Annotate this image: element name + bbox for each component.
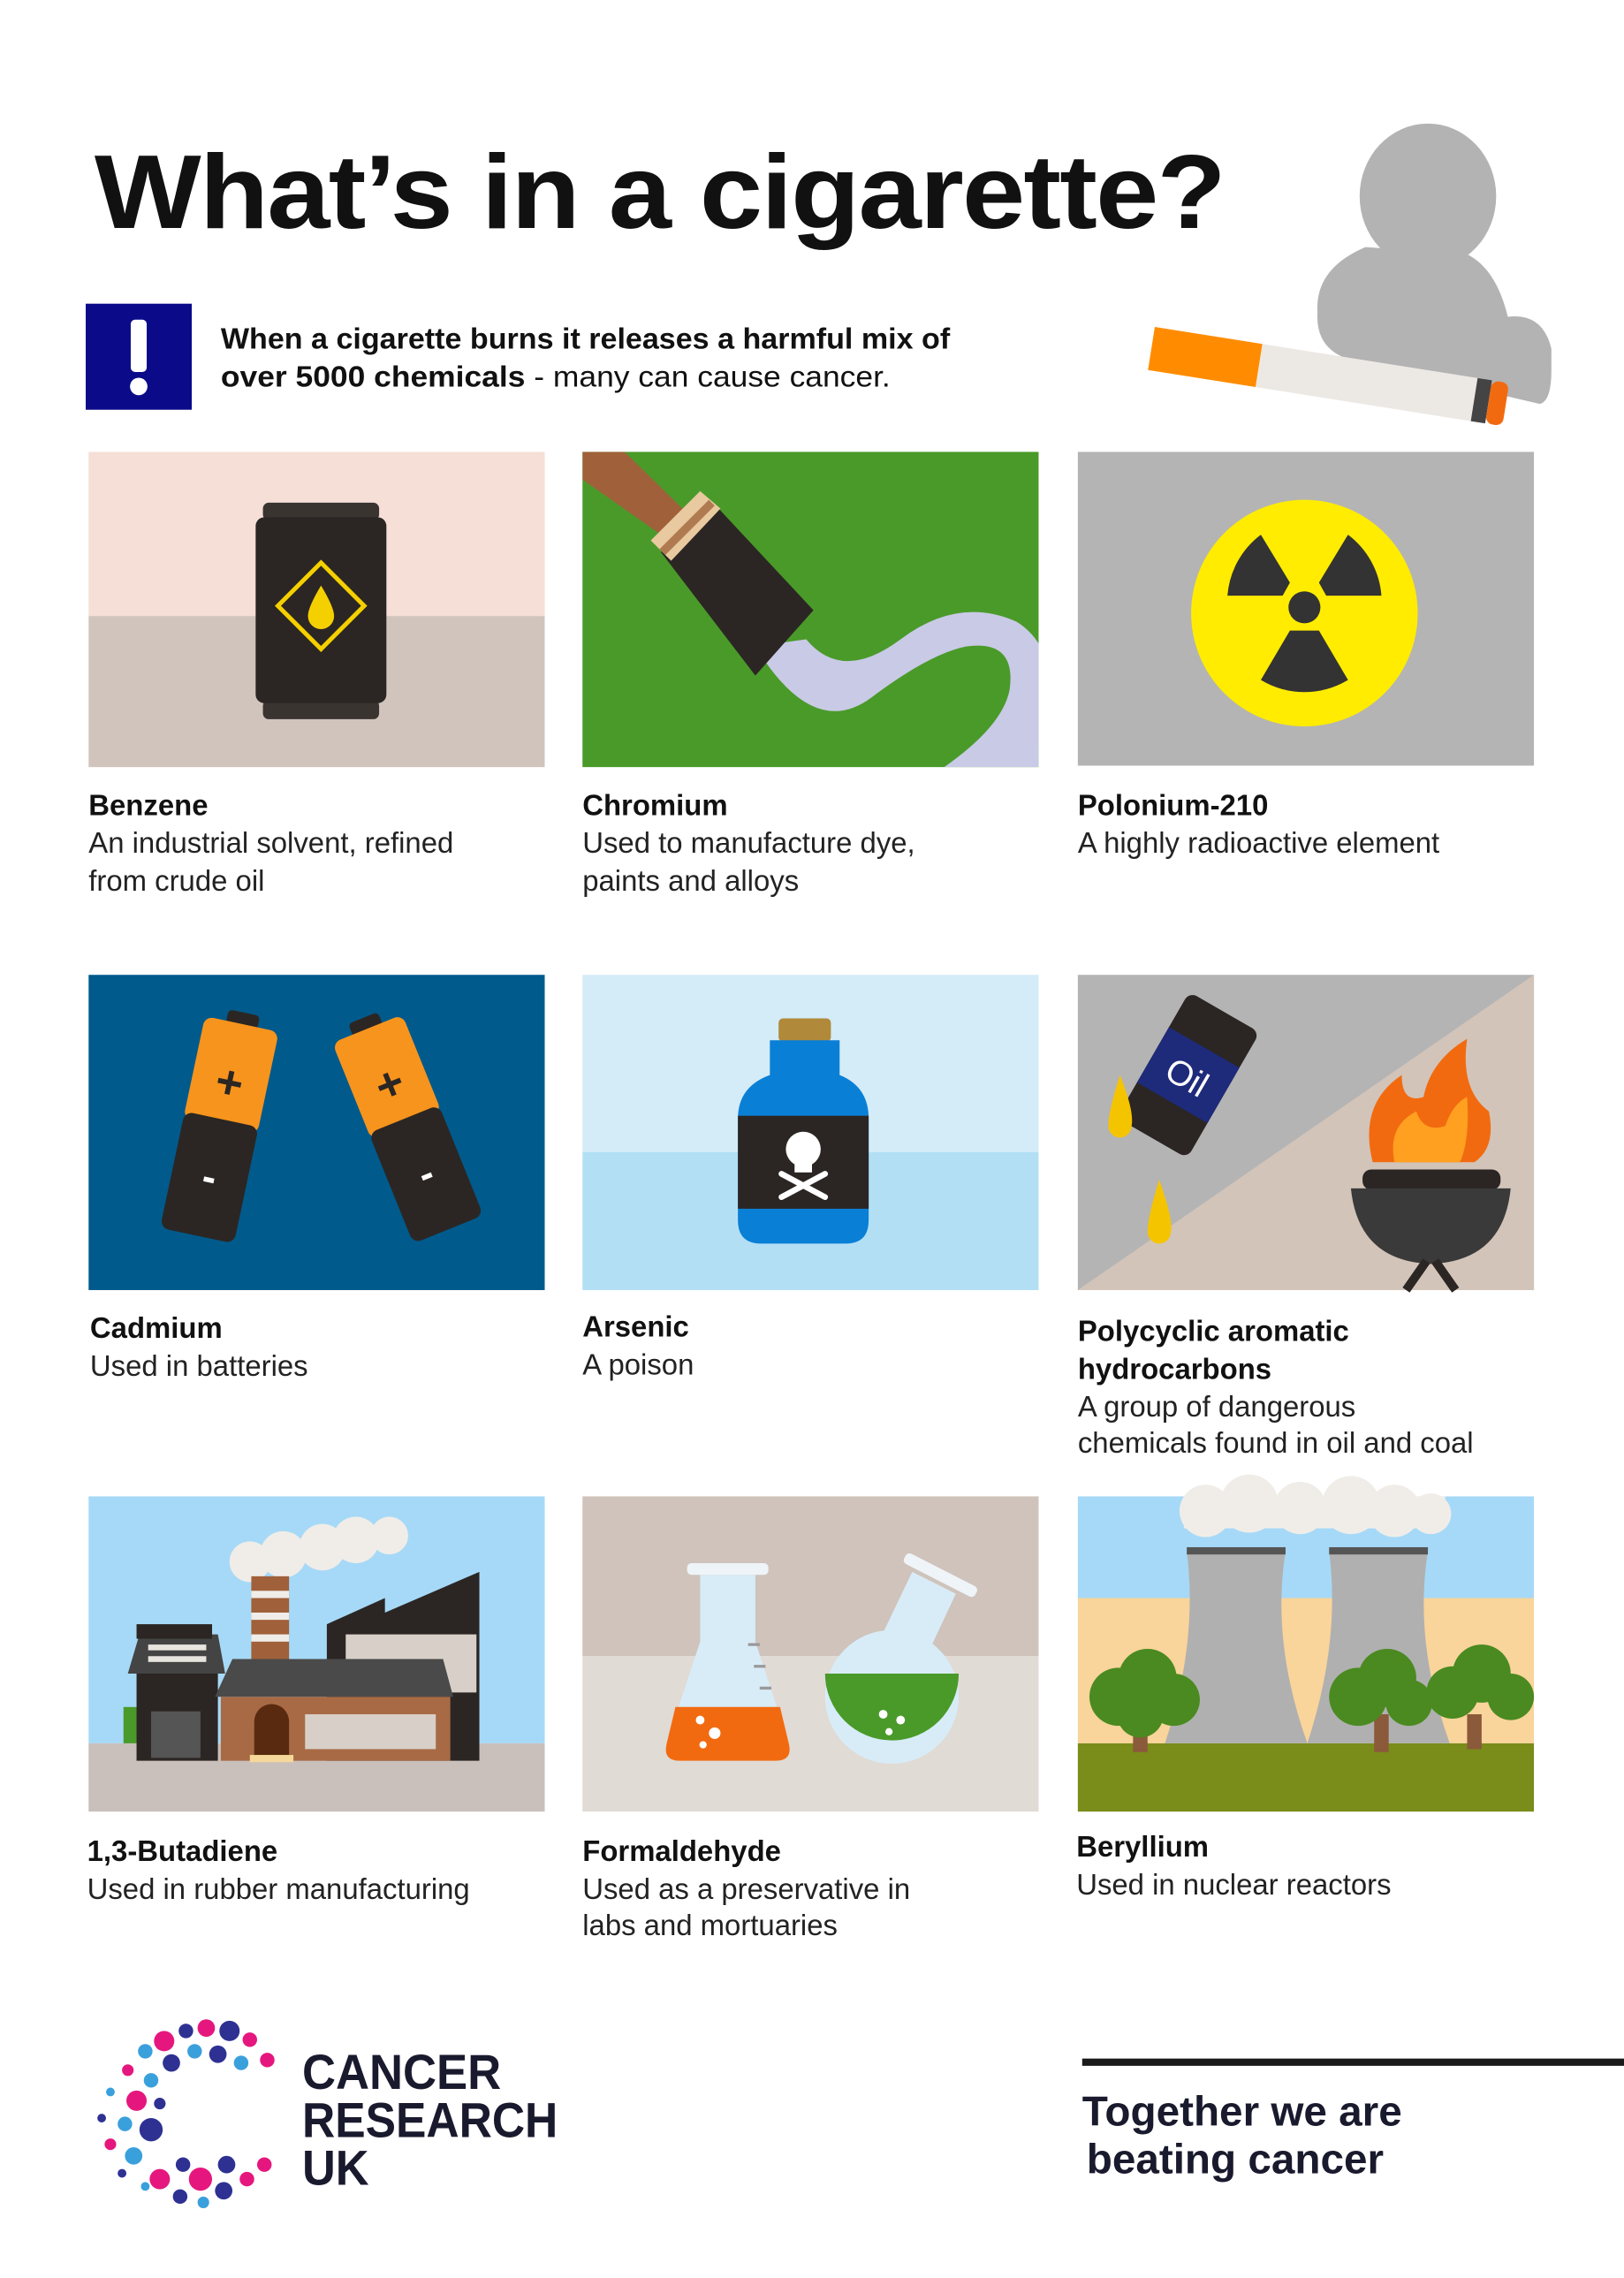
panel: cadmium <box>88 975 545 1382</box>
panel: polonium <box>1078 452 1534 859</box>
panel: arsenic: A poison <box>582 1348 694 1380</box>
tagline: Together we are <box>1082 2088 1402 2135</box>
panel: cadmium: Cadmium <box>90 1311 223 1344</box>
panel: benzene: from crude oil <box>88 864 264 897</box>
panel: formaldehyde: labs and mortuaries <box>582 1909 838 1941</box>
panel: cadmium: - <box>411 1150 441 1197</box>
panel: polycyclic aromatic hydrocarbons <box>1078 975 1534 1459</box>
panel: polonium: A highly radioactive element <box>1078 826 1439 859</box>
logo text: CANCER <box>302 2044 501 2100</box>
logo dots <box>97 2019 275 2208</box>
icon: smoke figure <box>1317 124 1552 404</box>
panel: formaldehyde <box>582 1496 1038 1941</box>
panel: polycyclic aromatic hydrocarbons: A group of dangerous <box>1078 1390 1355 1423</box>
panel: 1,3-butadiene: Used in rubber manufacturing <box>87 1872 470 1905</box>
warning callout <box>86 304 951 410</box>
panel: cadmium: Used in batteries <box>90 1349 308 1382</box>
warning text: When a cigarette burns it releases a harmful mix of <box>221 323 951 355</box>
panel: cadmium: + <box>211 1054 248 1111</box>
panel: benzene <box>88 452 545 897</box>
icon: cigarette <box>1148 327 1509 426</box>
panel: arsenic: Arsenic <box>582 1310 689 1343</box>
logo: Cancer Research UK: RESEARCH <box>302 2092 558 2147</box>
panel: chromium: Used to manufacture dye, <box>582 826 915 859</box>
tagline <box>1082 2088 1402 2183</box>
panel: chromium: paints and alloys <box>582 864 799 897</box>
panel: formaldehyde: Formaldehyde <box>582 1834 781 1867</box>
logo: Cancer Research UK <box>97 2019 558 2208</box>
panel: benzene: An industrial solvent, refined <box>88 826 453 859</box>
icon: exclamation <box>86 304 192 410</box>
panel: chromium: Chromium <box>582 788 728 821</box>
tagline: beating cancer <box>1087 2137 1384 2183</box>
warning callout: over 5000 chemicals - many can cause cancer. <box>221 360 891 392</box>
panel: beryllium <box>1076 1475 1534 1901</box>
panel: formaldehyde: Used as a preservative in <box>582 1872 910 1905</box>
panel: cadmium: - <box>198 1152 221 1200</box>
panel: polycyclic aromatic hydrocarbons: chemicals found in oil and coal <box>1078 1426 1474 1459</box>
panel: 1,3-butadiene <box>87 1496 545 1905</box>
panel: polycyclic aromatic hydrocarbons: Polycyclic aromatic <box>1078 1315 1349 1348</box>
panel: 1,3-butadiene: 1,3-Butadiene <box>87 1834 277 1867</box>
panel: beryllium: Beryllium <box>1076 1830 1209 1863</box>
panel: polycyclic aromatic hydrocarbons: Oil <box>1158 1051 1215 1105</box>
panel: beryllium: Used in nuclear reactors <box>1076 1868 1392 1901</box>
panel: benzene: Benzene <box>88 788 208 821</box>
panel: cadmium: + <box>368 1055 412 1113</box>
panel: polycyclic aromatic hydrocarbons: hydrocarbons <box>1078 1352 1271 1385</box>
panel: polonium: Polonium-210 <box>1078 788 1268 821</box>
panel: chromium <box>582 452 1049 897</box>
logo: Cancer Research UK: UK <box>302 2140 369 2196</box>
title: What’s in a cigarette? <box>95 134 1225 251</box>
panel: arsenic <box>582 975 1038 1380</box>
